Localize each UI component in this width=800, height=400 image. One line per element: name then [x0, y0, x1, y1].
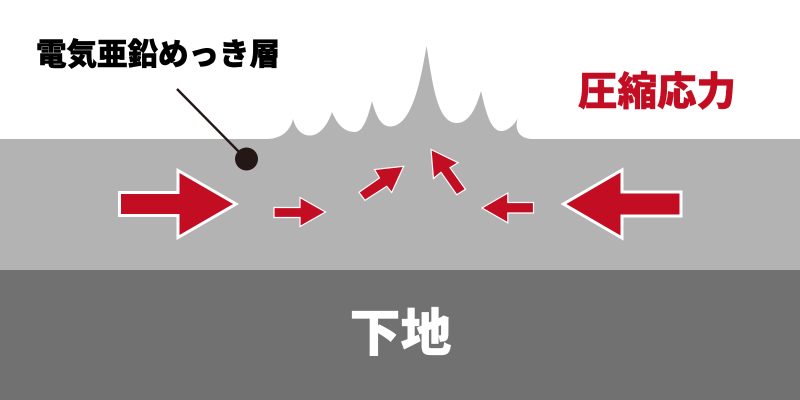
substrate layer: [0, 270, 800, 400]
plating layer with whisker spikes: [0, 46, 800, 271]
arrow: small right: [274, 198, 326, 226]
arrow: large right: [564, 170, 681, 238]
label: compressive stress: 圧縮応力: [578, 70, 736, 114]
arrow: small up-right: [359, 166, 404, 200]
arrow: small up-left: [431, 150, 466, 195]
arrow: small left: [482, 193, 534, 223]
label: substrate: 下地: [350, 305, 452, 362]
leader dot: [235, 148, 258, 170]
arrow: large left: [120, 170, 236, 238]
leader line: [177, 89, 245, 158]
label: electro-galvanized layer: 電気亜鉛めっき層: [36, 38, 280, 72]
